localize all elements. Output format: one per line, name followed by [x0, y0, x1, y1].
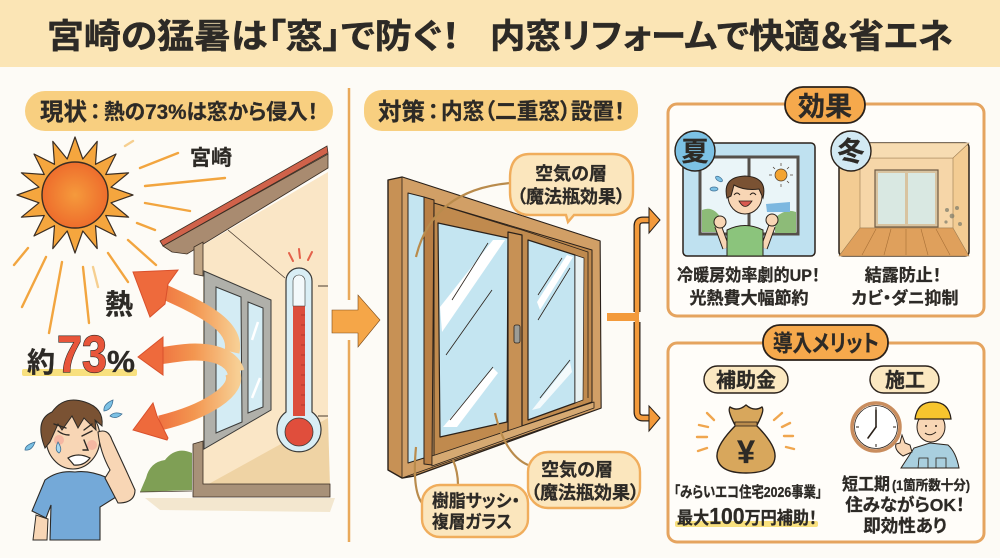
callout: air layer top	[416, 154, 633, 257]
heading: subsidy	[704, 366, 788, 393]
panel: merits	[668, 325, 984, 542]
arrow: situation to countermeasure	[332, 295, 380, 347]
caption: winter	[852, 266, 958, 308]
text: subsidy details: 「みらいエコ住宅2026事業」	[674, 483, 822, 501]
stat: about 73 percent	[22, 326, 137, 384]
heading: merits: 導入メリット	[773, 330, 879, 356]
icon: money bag: ¥	[737, 434, 755, 470]
caption: winter: 結露防止！	[865, 266, 941, 285]
illustration: summer	[683, 143, 815, 256]
icon: winter badge: 冬	[838, 137, 864, 167]
stat: about 73 percent: 約	[27, 347, 55, 378]
illustration: inner window	[388, 177, 601, 478]
caption: winter: カビ・ダニ抑制	[852, 288, 958, 308]
heading: subsidy: 補助金	[716, 369, 776, 392]
heading: countermeasure: 内窓（二重窓）設置！	[441, 99, 625, 124]
caption: summer	[677, 266, 820, 308]
callout: air layer bottom: （魔法瓶効果）	[531, 483, 639, 503]
callout: resin sash and double glazing: 樹脂サッシ・	[432, 491, 520, 511]
heading: current situation: 現状	[40, 99, 87, 126]
heading: current situation: 熱の73%は窓から侵入！	[104, 101, 318, 124]
panel: current situation	[14, 91, 335, 540]
heading: merits	[763, 325, 888, 360]
icon: summer badge: 夏	[682, 137, 708, 167]
heading: construction	[870, 366, 939, 393]
illustration: overheated man	[25, 400, 135, 540]
text: subsidy details: 最大100万円補助！	[677, 503, 817, 529]
label: heat: 熱	[105, 289, 133, 320]
caption: summer: 冷暖房効率劇的UP！	[677, 266, 820, 285]
illustration: winter	[839, 143, 969, 256]
heading: countermeasure	[364, 90, 638, 131]
icon: winter badge	[831, 131, 871, 171]
illustration: house wall	[140, 146, 335, 512]
illustration: house window	[204, 271, 271, 449]
text: construction details: (1箇所数十分)	[892, 477, 970, 493]
heading: current situation: ：	[90, 101, 100, 124]
panel: countermeasure	[364, 90, 640, 537]
arrows: bracket to outcome panels	[607, 208, 660, 431]
caption: summer: 光熱費大幅節約	[690, 288, 808, 308]
heading: construction: 施工	[885, 369, 925, 392]
icon: construction worker	[896, 402, 959, 468]
stat: about 73 percent: %	[107, 344, 135, 379]
heading: effects: 効果	[798, 92, 852, 122]
icon: thermometer	[277, 249, 321, 452]
icon: summer badge	[675, 131, 715, 171]
heading: countermeasure: ：	[428, 101, 438, 124]
icon: sun	[14, 137, 225, 333]
callout: air layer top: 空気の層	[535, 163, 607, 184]
text: construction details	[842, 475, 970, 536]
heading: current situation	[25, 91, 333, 131]
callout: resin sash and double glazing	[415, 447, 528, 537]
stat: about 73 percent: 73	[57, 326, 107, 384]
callout: resin sash and double glazing: 複層ガラス	[432, 512, 512, 532]
callout: air layer bottom: 空気の層	[541, 459, 613, 480]
label: Miyazaki: 宮崎	[190, 147, 232, 170]
title banner	[0, 0, 1000, 67]
text: subsidy details	[674, 483, 822, 529]
icon: clock	[852, 403, 900, 451]
title banner: 宮崎の猛暑は「窓」で防ぐ！	[47, 18, 460, 56]
callout: air layer bottom	[495, 413, 640, 508]
arrows: heat entering through the window	[133, 270, 236, 440]
title banner: 内窓リフォームで快適＆省エネ	[490, 18, 953, 56]
text: construction details: 短工期	[842, 475, 890, 494]
text: construction details: 住みながらOK！	[845, 495, 965, 515]
heading: countermeasure: 対策	[378, 99, 425, 126]
callout: air layer top: （魔法瓶効果）	[517, 187, 625, 207]
text: construction details: 即効性あり	[863, 516, 947, 536]
icon: money bag	[697, 405, 794, 473]
panel: effects	[668, 87, 984, 316]
heading: effects	[785, 87, 865, 123]
